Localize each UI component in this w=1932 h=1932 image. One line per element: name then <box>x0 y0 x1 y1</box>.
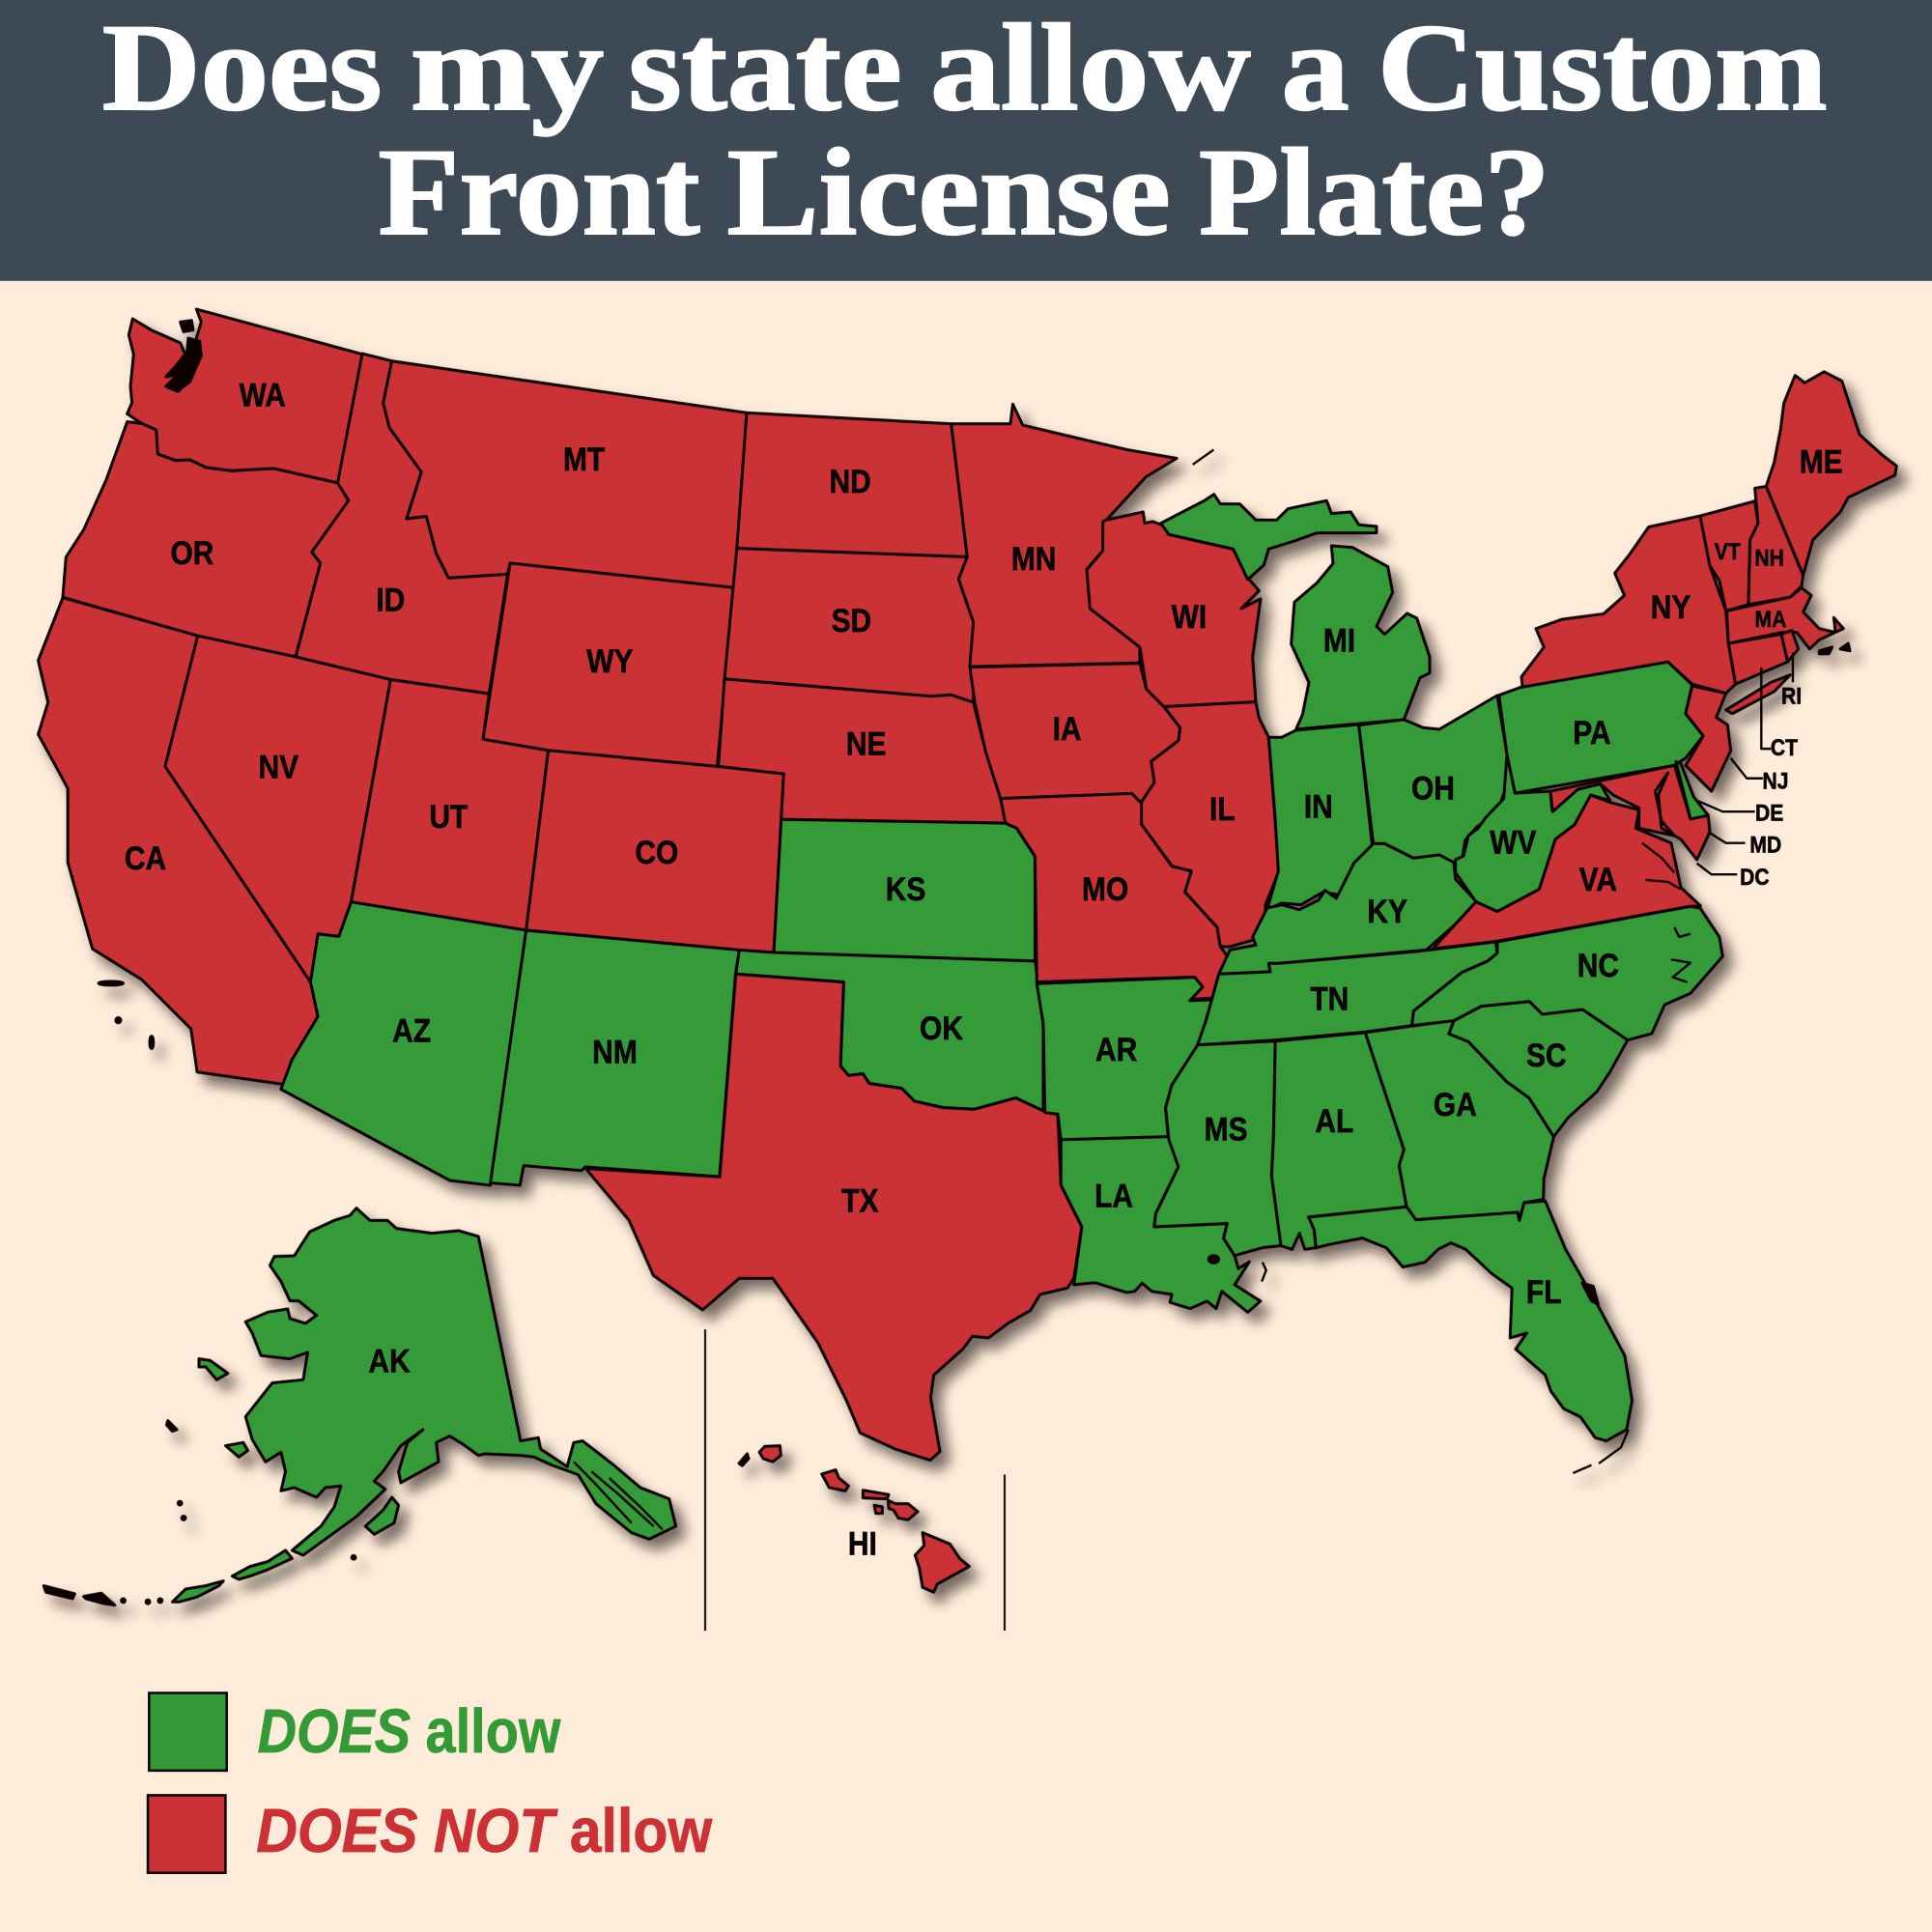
state: SC <box>1449 1002 1628 1137</box>
small state abbreviations <box>1715 538 1802 890</box>
state abbreviations: AK <box>368 1343 411 1379</box>
state: IN <box>1267 724 1374 910</box>
state: NH <box>1748 486 1804 605</box>
coastal water details <box>99 321 1850 1473</box>
state: WY <box>483 563 734 766</box>
small state abbreviations: RI <box>1781 682 1802 709</box>
state abbreviations: KY <box>1367 893 1407 929</box>
state: AL <box>1271 1033 1406 1249</box>
small state abbreviations: NJ <box>1763 767 1788 794</box>
state abbreviations: IL <box>1209 790 1236 828</box>
state: WI <box>1087 512 1261 707</box>
state: NV <box>165 636 390 982</box>
title banner: Front <box>379 123 700 261</box>
state: MI <box>1161 495 1430 729</box>
title banner: state <box>629 0 902 136</box>
Hawaii inset divider lines <box>705 1329 1005 1631</box>
state abbreviations: IA <box>1053 710 1082 748</box>
state: FL <box>1309 1201 1633 1441</box>
state: KS <box>774 819 1035 961</box>
legend swatch: does not allow <box>148 1795 225 1873</box>
state: MS <box>1154 1041 1281 1256</box>
state abbreviations: TN <box>1310 980 1349 1017</box>
state abbreviations: ND <box>829 463 871 499</box>
state: DE <box>1676 762 1708 819</box>
state abbreviations: MT <box>563 440 605 477</box>
state abbreviations: FL <box>1526 1273 1562 1311</box>
state abbreviations: IN <box>1304 788 1333 825</box>
state abbreviations: MS <box>1205 1111 1248 1148</box>
title banner: allow <box>930 0 1251 136</box>
small state abbreviations: MD <box>1749 831 1781 858</box>
state: VA <box>1433 795 1700 949</box>
state: AK <box>43 1208 676 1605</box>
state: MN <box>952 404 1177 667</box>
state: TX <box>585 974 1082 1461</box>
state: GA <box>1365 1020 1553 1220</box>
map of US states <box>39 309 1896 1605</box>
state: CT <box>1728 635 1788 684</box>
state: RI <box>1781 631 1799 662</box>
state abbreviations: CA <box>125 839 166 877</box>
title banner: Plate? <box>1199 123 1550 261</box>
small state abbreviations: CT <box>1771 733 1798 760</box>
title banner <box>0 0 1932 281</box>
state: NC <box>1412 906 1722 1040</box>
state: SD <box>724 549 974 702</box>
state abbreviations: SC <box>1526 1037 1567 1074</box>
state: ME <box>1766 372 1896 575</box>
small state abbreviations: DE <box>1755 799 1783 826</box>
state abbreviations: WV <box>1490 824 1537 861</box>
state: OK <box>736 950 1043 1111</box>
title banner: my <box>411 0 604 136</box>
legend <box>148 1693 713 1873</box>
state: AZ <box>281 902 526 1185</box>
state abbreviations: VA <box>1579 861 1617 897</box>
title banner: a <box>1282 0 1350 136</box>
state: IA <box>970 664 1180 804</box>
state: KY <box>1219 843 1476 974</box>
title banner: Custom <box>1378 0 1828 136</box>
state abbreviations: WA <box>240 377 286 413</box>
state abbreviations: NM <box>592 1033 638 1070</box>
small state abbreviations: MA <box>1755 606 1786 633</box>
state abbreviations: NY <box>1651 588 1690 625</box>
state: UT <box>352 679 549 930</box>
state: NY <box>1521 516 1790 714</box>
state abbreviations: ME <box>1800 442 1843 480</box>
state abbreviations: AL <box>1315 1102 1353 1139</box>
state abbreviations: WI <box>1172 598 1207 636</box>
state abbreviations: GA <box>1434 1086 1477 1123</box>
state: PA <box>1499 662 1703 793</box>
title banner: Does <box>102 0 382 136</box>
state abbreviations: MI <box>1323 621 1355 659</box>
leader lines for small northeast states <box>1697 653 1793 874</box>
state abbreviations: AR <box>1095 1031 1137 1067</box>
state abbreviations: NV <box>258 749 299 785</box>
state abbreviations: AZ <box>392 1012 431 1049</box>
state: NM <box>491 930 739 1185</box>
state: OR <box>63 422 349 657</box>
state abbreviations: LA <box>1094 1178 1133 1214</box>
state: WA <box>128 309 362 483</box>
state: NE <box>719 679 1006 823</box>
state abbreviations: NC <box>1577 947 1619 984</box>
state abbreviations: ID <box>376 581 405 618</box>
state: AR <box>1037 978 1212 1140</box>
small state abbreviations: VT <box>1715 538 1741 564</box>
state: MD <box>1550 765 1710 860</box>
state abbreviations: OK <box>920 1009 963 1047</box>
state abbreviations: PA <box>1573 714 1611 751</box>
state abbreviations: KS <box>886 870 925 907</box>
state abbreviations: MO <box>1082 870 1128 907</box>
state abbreviations: MN <box>1011 540 1056 578</box>
state: MA <box>1726 588 1843 649</box>
state: NJ <box>1686 686 1731 791</box>
state abbreviations: OR <box>171 534 213 571</box>
legend text: does allow: DOES allow <box>258 1696 561 1766</box>
state: LA <box>1061 1137 1261 1312</box>
state: CA <box>39 598 318 1084</box>
state: ND <box>737 412 967 557</box>
title banner: License <box>727 123 1171 261</box>
state abbreviations: UT <box>429 798 469 835</box>
state: MT <box>384 361 747 587</box>
state abbreviations: TX <box>841 1182 879 1219</box>
state abbreviations <box>125 377 1843 1562</box>
state abbreviations: OH <box>1411 769 1455 807</box>
state: WV <box>1456 754 1610 911</box>
legend swatch: does allow <box>149 1693 227 1771</box>
state: MO <box>1001 793 1230 999</box>
state: ID <box>296 354 508 694</box>
state: CO <box>526 751 783 952</box>
state: VT <box>1700 501 1758 611</box>
state: TN <box>1198 942 1497 1045</box>
state abbreviations: NE <box>846 725 886 762</box>
state abbreviations: WY <box>586 642 634 680</box>
small state abbreviations: NH <box>1754 544 1784 571</box>
state abbreviations: HI <box>848 1524 877 1562</box>
state: HI <box>739 1446 969 1592</box>
state: OH <box>1359 696 1509 863</box>
small state abbreviations: DC <box>1740 863 1770 890</box>
state: IL <box>1142 702 1279 947</box>
state abbreviations: SD <box>832 602 871 639</box>
legend text: does not allow: DOES NOT allow <box>256 1796 713 1865</box>
state abbreviations: CO <box>635 834 678 870</box>
